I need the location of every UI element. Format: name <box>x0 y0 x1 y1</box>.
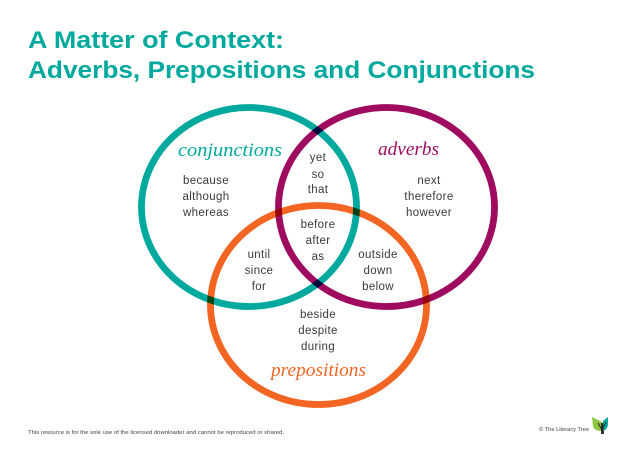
conjunctions only words: whereas <box>182 207 229 219</box>
all three words <box>301 219 335 263</box>
copyright: © The Literacy Tree <box>539 426 589 433</box>
conjunctions and prepositions words <box>245 249 273 293</box>
adverbs and prepositions words <box>358 249 398 293</box>
all three words: as <box>312 251 324 263</box>
prepositions only words: despite <box>298 325 338 337</box>
adverbs only words: next <box>417 175 441 187</box>
adverbs and prepositions words: down <box>364 265 392 277</box>
title <box>28 27 535 84</box>
conjunctions and prepositions words: since <box>245 265 273 277</box>
prepositions only words <box>298 309 338 353</box>
conjunctions and adverbs words: so <box>312 169 324 181</box>
adverbs and prepositions words: below <box>362 281 394 293</box>
title: Adverbs, Prepositions and Conjunctions <box>28 57 535 84</box>
adverbs only words <box>404 175 454 219</box>
conjunctions and prepositions words: for <box>252 281 266 293</box>
heading: conjunctions: conjunctions <box>178 140 282 161</box>
conjunctions only words: because <box>183 175 229 187</box>
conjunctions and adverbs words <box>308 152 329 196</box>
conjunctions only words: although <box>183 191 229 203</box>
conjunctions and adverbs words: that <box>308 184 329 196</box>
prepositions only words: beside <box>300 309 336 321</box>
venn diagram circles <box>142 108 494 404</box>
heading: prepositions: prepositions <box>269 360 366 381</box>
conjunctions and adverbs words: yet <box>310 152 327 164</box>
all three words: before <box>301 219 335 231</box>
all three words: after <box>306 235 330 247</box>
conjunctions and prepositions words: until <box>248 249 270 261</box>
conjunctions only words <box>182 175 229 219</box>
title: A Matter of Context: <box>28 27 284 54</box>
footer note: This resource is for the sole use of the licensed downloader and cannot be reproduced or shared. <box>28 430 285 436</box>
adverbs only words: therefore <box>404 191 454 203</box>
heading: adverbs: adverbs <box>378 139 439 160</box>
adverbs and prepositions words: outside <box>358 249 398 261</box>
adverbs only words: however <box>406 207 452 219</box>
prepositions only words: during <box>301 341 335 353</box>
icon: tree logo <box>592 417 608 434</box>
